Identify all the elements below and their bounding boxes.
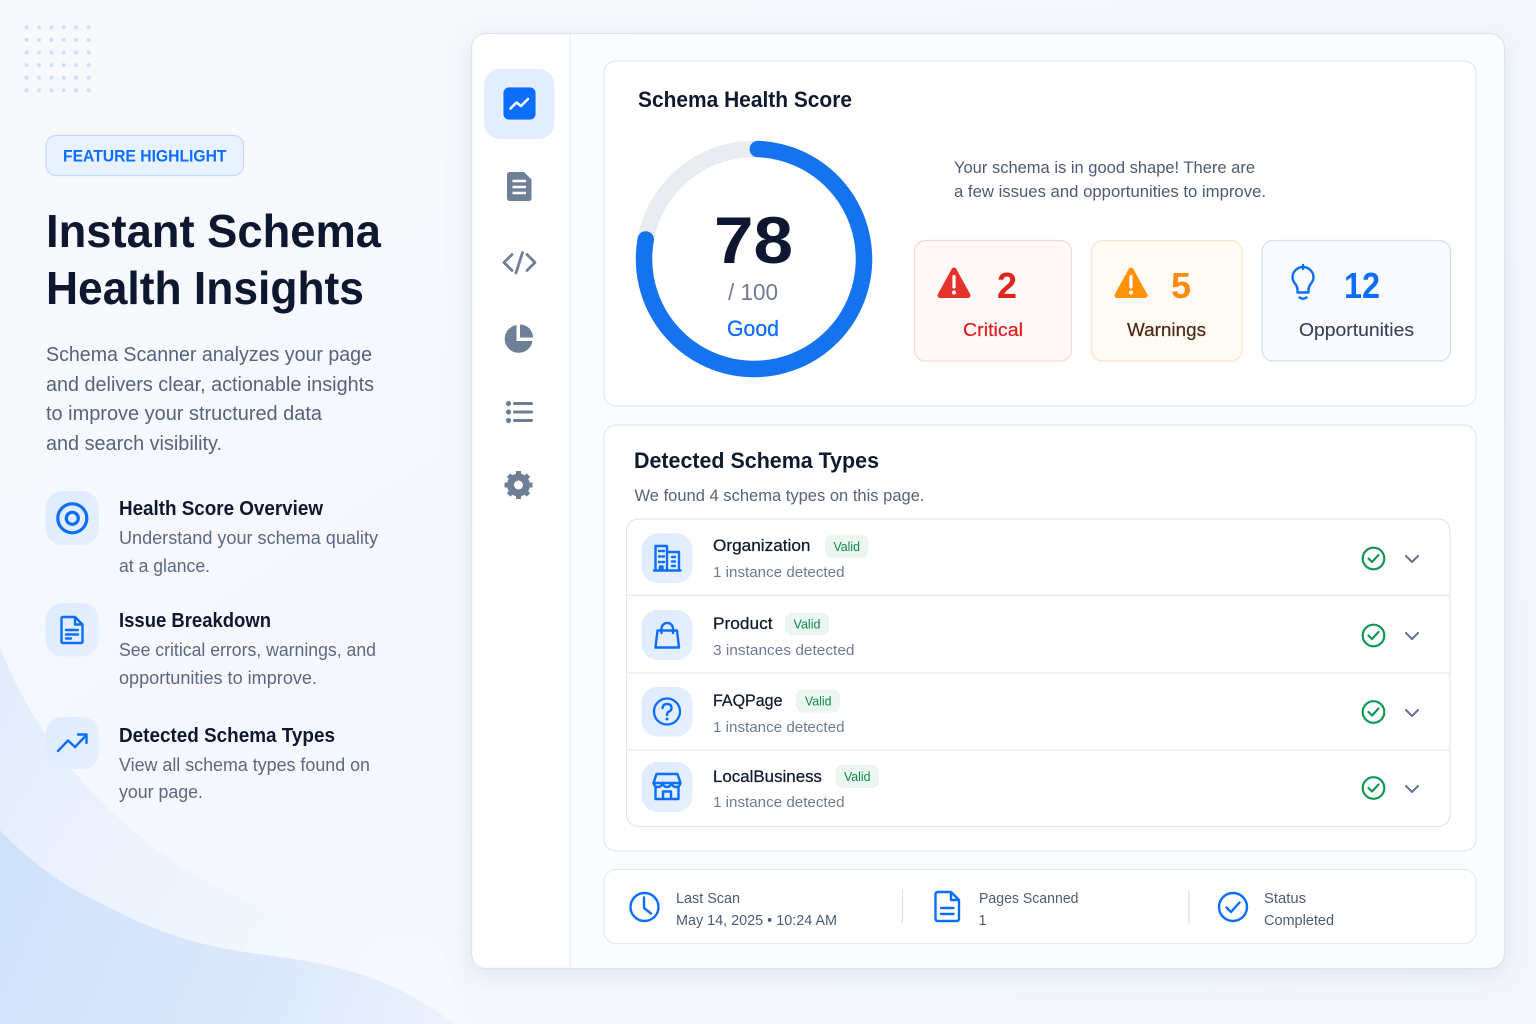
score summary <box>954 159 1266 201</box>
row: organization <box>642 534 1418 583</box>
gauge <box>640 145 868 373</box>
subheading: We found 4 schema types on this page. <box>634 487 924 505</box>
row: local business <box>642 762 1418 812</box>
row: local business: 1 instance detected <box>713 794 844 811</box>
icon: document <box>507 172 532 201</box>
icon: chevron <box>1406 556 1418 562</box>
panel: scan details <box>604 870 1476 944</box>
title: Health Insights <box>46 262 364 314</box>
card: warnings <box>1092 240 1242 361</box>
row: organization: Organization <box>713 536 810 555</box>
schema list <box>626 519 1450 826</box>
title <box>46 205 381 314</box>
icon: storefront <box>642 762 692 812</box>
card: warnings: Warnings <box>1127 319 1206 340</box>
badge: feature highlight: FEATURE HIGHLIGHT <box>63 146 227 166</box>
icon: gear <box>504 471 532 499</box>
card: opportunities: 12 <box>1344 265 1380 306</box>
feature: issue breakdown <box>46 603 376 688</box>
card: critical <box>914 240 1072 361</box>
card: critical: 2 <box>997 265 1017 306</box>
gauge: 78 <box>714 203 793 277</box>
feature: issue breakdown: opportunities to improve. <box>119 668 317 688</box>
icon: shopping bag <box>642 610 692 660</box>
intro paragraph <box>46 344 374 455</box>
intro paragraph: to improve your structured data <box>46 403 323 425</box>
icon: clock <box>630 893 658 921</box>
icon: chevron <box>1406 786 1418 792</box>
row: local business: LocalBusiness <box>713 767 822 786</box>
icon: chevron <box>1406 633 1418 639</box>
panel: schema health score <box>604 61 1476 406</box>
app window <box>472 34 1504 968</box>
row: faq page: FAQPage <box>713 691 782 710</box>
feature: health score overview: Understand your schema quality <box>119 528 378 548</box>
icon: valid check <box>1363 701 1384 723</box>
gauge: / 100 <box>728 279 778 305</box>
heading: Schema Health Score <box>638 87 852 112</box>
stat: last scan <box>630 891 837 929</box>
feature: detected schema types: Detected Schema Types <box>119 725 335 747</box>
feature: health score overview: Health Score Overview <box>119 498 323 520</box>
badge: valid <box>836 765 879 788</box>
feature: detected schema types: your page. <box>119 782 203 802</box>
stat: pages scanned <box>936 891 1078 929</box>
stat: status: Status <box>1264 891 1306 907</box>
score summary: a few issues and opportunities to improve. <box>954 183 1266 201</box>
intro paragraph: and search visibility. <box>46 433 222 455</box>
icon: valid check <box>1363 625 1384 646</box>
icon: critical triangle <box>940 270 968 296</box>
icon: question <box>642 687 692 736</box>
title: Instant Schema <box>46 205 381 257</box>
feature: detected schema types: View all schema types found on <box>119 755 370 775</box>
row: faq page: 1 instance detected <box>713 719 844 736</box>
feature: detected schema types <box>46 717 370 802</box>
icon: target <box>46 491 99 545</box>
badge: valid: Valid <box>805 694 832 708</box>
card: critical: Critical <box>963 319 1023 340</box>
feature: health score overview: at a glance. <box>119 556 210 576</box>
icon: warning triangle <box>1117 270 1145 296</box>
intro paragraph: and delivers clear, actionable insights <box>46 374 374 396</box>
badge: valid <box>796 690 840 712</box>
icon: completed check <box>1219 893 1247 921</box>
stat: pages scanned: Pages Scanned <box>979 891 1078 907</box>
icon: chevron <box>1406 710 1418 716</box>
row: faq page <box>642 687 1418 736</box>
row: product: 3 instances detected <box>713 642 854 659</box>
icon: pie chart <box>505 324 533 353</box>
icon: list <box>506 401 532 423</box>
stat: pages scanned: 1 <box>978 913 987 929</box>
feature: issue breakdown: Issue Breakdown <box>119 610 271 632</box>
stat: status <box>1219 891 1334 929</box>
badge: valid: Valid <box>844 770 871 784</box>
icon: building <box>642 534 692 583</box>
card: opportunities <box>1262 240 1450 361</box>
badge: feature highlight <box>46 136 244 176</box>
sidebar icons <box>484 69 554 499</box>
feature: health score overview <box>46 491 378 576</box>
icon: active chart <box>484 69 554 139</box>
row: product <box>642 610 1418 660</box>
badge: valid <box>825 535 868 558</box>
panel: detected schema types <box>604 425 1476 851</box>
row: product: Product <box>713 614 773 633</box>
gauge: Good <box>727 316 779 341</box>
icon: page <box>936 892 959 921</box>
score summary: Your schema is in good shape! There are <box>954 159 1255 177</box>
badge: valid: Valid <box>794 618 821 632</box>
heading: Detected Schema Types <box>634 448 879 473</box>
feature: issue breakdown: See critical errors, warnings, and <box>119 640 376 660</box>
icon: trend arrow <box>46 717 99 769</box>
row: organization: 1 instance detected <box>713 564 844 581</box>
icon: document <box>46 603 99 656</box>
icon: valid check <box>1363 548 1384 569</box>
badge: valid: Valid <box>834 540 860 554</box>
icon: valid check <box>1363 777 1384 799</box>
card: warnings: 5 <box>1171 265 1191 306</box>
stat: last scan: Last Scan <box>676 891 740 907</box>
stat: last scan: May 14, 2025 • 10:24 AM <box>676 913 837 929</box>
intro paragraph: Schema Scanner analyzes your page <box>46 344 372 366</box>
badge: valid <box>785 612 829 636</box>
card: opportunities: Opportunities <box>1299 319 1414 340</box>
icon: light bulb <box>1292 265 1314 299</box>
icon: code <box>504 252 535 273</box>
stat: status: Completed <box>1264 913 1334 929</box>
